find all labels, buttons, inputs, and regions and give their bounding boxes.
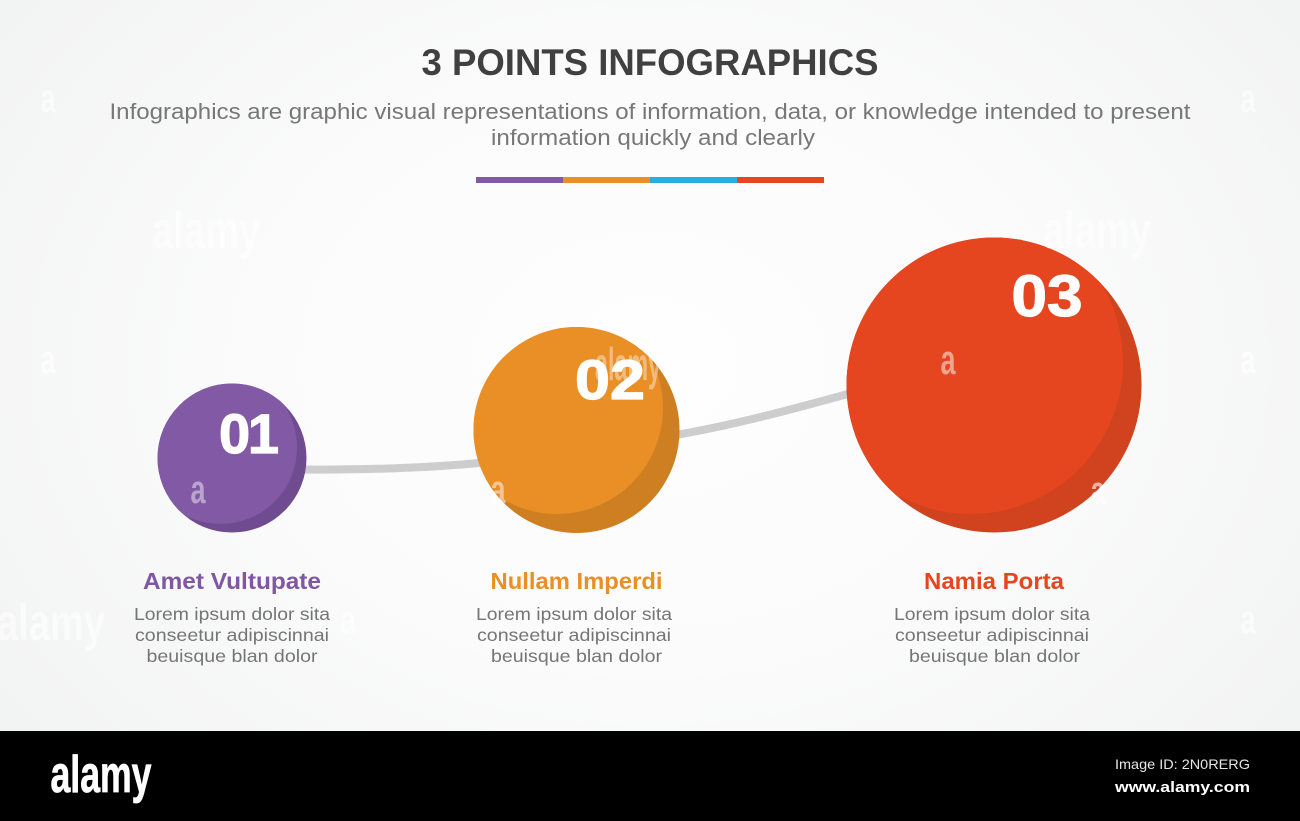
- number 02: 02: [575, 348, 645, 411]
- number 01: 01: [219, 402, 279, 465]
- watermarks: alamy: [1043, 202, 1151, 260]
- item 1 text: Amet Vultupate: [143, 568, 321, 594]
- footer image id and url: [1114, 756, 1250, 796]
- item 3 text: Namia Porta: [924, 568, 1064, 594]
- watermarks: a: [190, 468, 206, 512]
- title: 3 POINTS INFOGRAPHICS: [422, 42, 878, 83]
- subtitle: information quickly and clearly: [491, 125, 815, 150]
- footer band: [0, 731, 1300, 821]
- watermarks: a: [1240, 77, 1256, 121]
- item 3 text: beuisque blan dolor: [909, 646, 1080, 666]
- item 2 text: Lorem ipsum dolor sita: [476, 604, 672, 624]
- item 3 text: [894, 568, 1090, 666]
- watermarks: a: [490, 468, 506, 512]
- item 2 text: beuisque blan dolor: [491, 646, 662, 666]
- item 1 text: beuisque blan dolor: [146, 646, 318, 666]
- item 2 text: [476, 568, 672, 666]
- item 1 text: [134, 568, 330, 666]
- item 3 text: Lorem ipsum dolor sita: [894, 604, 1090, 624]
- subtitle: Infographics are graphic visual representations of information, data, or knowledge intended to present: [110, 99, 1190, 124]
- circle 2: [474, 327, 680, 533]
- watermarks: a: [40, 77, 56, 121]
- item 1 text: conseetur adipiscinnai: [135, 625, 329, 645]
- watermarks: a: [1090, 469, 1106, 513]
- circle 1: [158, 384, 306, 532]
- item 3 text: conseetur adipiscinnai: [895, 625, 1089, 645]
- subtitle: [110, 99, 1190, 150]
- connecting curve: [300, 392, 855, 470]
- colour divider bar: [476, 177, 824, 183]
- footer logo: alamy: [50, 746, 152, 804]
- watermarks: a: [940, 336, 956, 383]
- item 2 text: conseetur adipiscinnai: [477, 625, 671, 645]
- watermarks: a: [1240, 598, 1256, 642]
- watermarks: a: [1240, 338, 1256, 382]
- watermarks: alamy: [152, 202, 260, 260]
- watermarks: alamy: [595, 338, 661, 390]
- watermarks: [0, 77, 1256, 652]
- footer image id and url: www.alamy.com: [1114, 779, 1250, 796]
- footer image id and url: Image ID: 2N0RERG: [1115, 756, 1250, 772]
- item 2 text: Nullam Imperdi: [490, 568, 662, 594]
- item 1 text: Lorem ipsum dolor sita: [134, 604, 330, 624]
- circle 3: [846, 238, 1142, 532]
- watermarks: a: [340, 598, 356, 642]
- watermarks: alamy: [0, 594, 105, 652]
- number 03: 03: [1012, 264, 1082, 329]
- watermarks: a: [40, 338, 56, 382]
